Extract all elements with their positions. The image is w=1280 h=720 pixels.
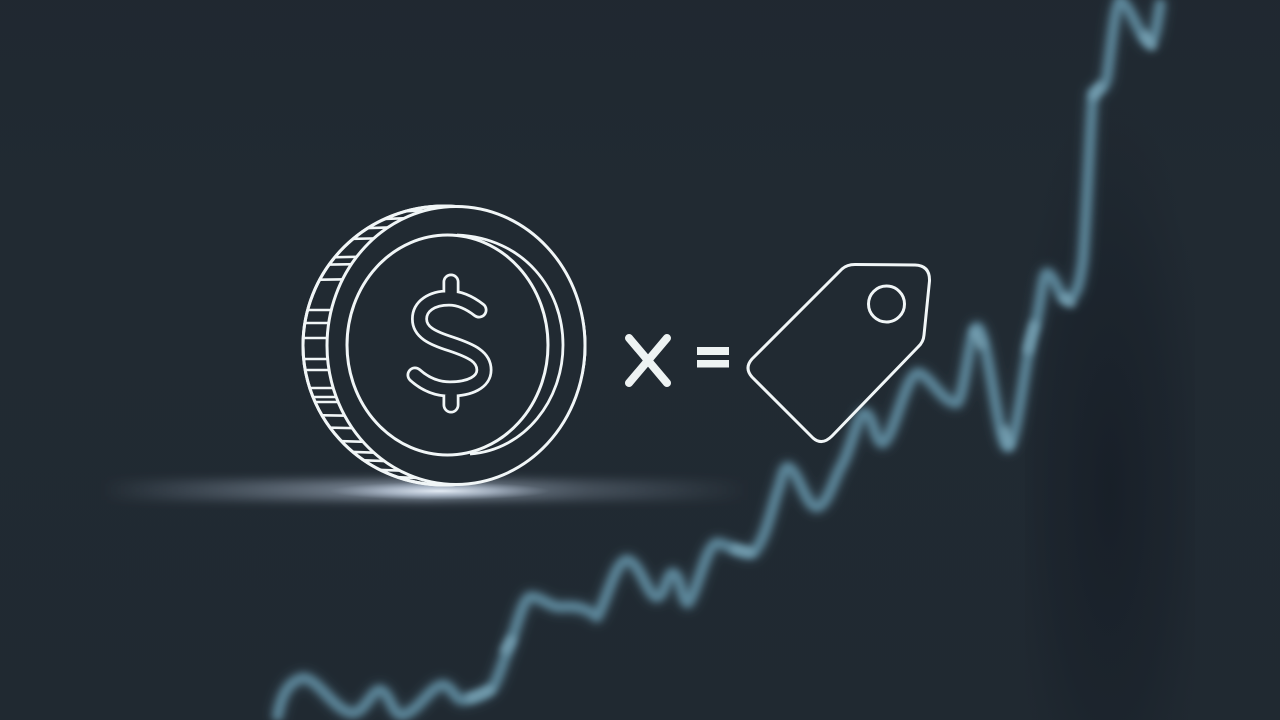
line chart: blurred rising price line bbox=[277, 0, 1161, 720]
multiply sign bbox=[629, 338, 667, 383]
icon: price tag bbox=[748, 264, 930, 442]
icon: dollar coin bbox=[300, 206, 585, 485]
coin edge with ridges bbox=[300, 206, 585, 485]
inner ring bbox=[347, 235, 563, 455]
coin face bbox=[327, 206, 585, 484]
dollar sign bbox=[415, 282, 484, 405]
equals sign bbox=[697, 347, 729, 368]
light streak under coin bbox=[100, 480, 750, 500]
tag hole bbox=[868, 286, 904, 322]
dark vertical band behind chart bbox=[1025, 60, 1195, 720]
